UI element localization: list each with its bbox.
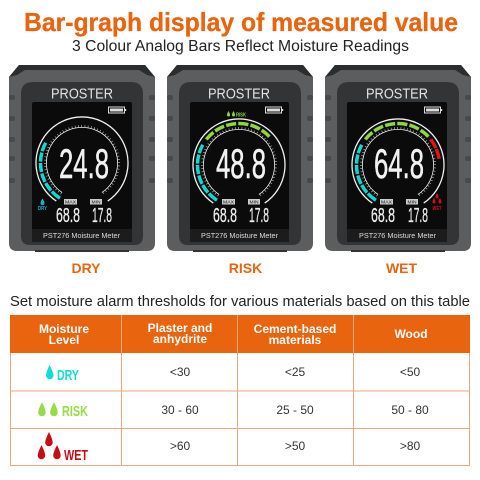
device: dry reading: 17.8 — [92, 205, 112, 227]
table heading: Set moisture alarm thresholds for various materials based on this table — [10, 293, 470, 310]
device: risk reading: MIN — [250, 200, 258, 204]
device: wet reading — [325, 65, 471, 252]
device: dry reading: PST276 Moisture Meter — [43, 233, 121, 240]
device: wet reading: MAX — [381, 200, 392, 204]
header cells: anhydrite — [153, 332, 207, 346]
label: wet: WET — [386, 260, 417, 276]
header cells: Moisture — [39, 322, 89, 336]
wet row: >80 — [400, 439, 421, 453]
device: wet reading: PROSTER — [366, 86, 428, 102]
device: wet reading: PST276 Moisture Meter — [359, 233, 437, 240]
wet row: >60 — [170, 439, 191, 453]
header cells: materials — [269, 333, 322, 347]
device: risk reading: PST276 Moisture Meter — [201, 233, 279, 240]
label: dry: DRY — [71, 260, 101, 276]
wet row: >50 — [285, 439, 306, 453]
risk row — [38, 402, 429, 420]
header cells: Plaster and — [148, 321, 212, 335]
dry row: <25 — [285, 365, 306, 379]
risk row: 50 - 80 — [391, 403, 429, 417]
device: risk reading: 17.8 — [249, 205, 269, 227]
device: risk reading — [167, 65, 313, 252]
device: wet reading: WET — [432, 206, 442, 212]
device: dry reading — [9, 65, 155, 252]
table — [10, 315, 470, 466]
subtitle: 3 Colour Analog Bars Reflect Moisture Readings — [72, 38, 409, 55]
device: risk reading: MAX — [223, 200, 234, 204]
device: dry reading: MIN — [92, 200, 100, 204]
risk row: 30 - 60 — [161, 403, 199, 417]
device: risk reading: RISK — [236, 112, 246, 118]
device: wet reading: 64.8 — [374, 140, 424, 187]
device: dry reading: 68.8 — [56, 205, 80, 227]
dry row: <30 — [170, 365, 191, 379]
device: risk reading: 48.8 — [216, 140, 266, 187]
device: wet reading: 68.8 — [371, 205, 395, 227]
wet row: WET — [64, 447, 88, 464]
device: dry reading: DRY — [38, 206, 48, 212]
header cells — [39, 321, 428, 347]
device: dry reading: MAX — [65, 200, 76, 204]
device: dry reading: 24.8 — [59, 140, 109, 187]
device: wet reading: MIN — [408, 200, 416, 204]
risk row: 25 - 50 — [276, 403, 314, 417]
dry row: <50 — [400, 365, 421, 379]
wet row — [38, 432, 421, 464]
device: risk reading: 68.8 — [213, 205, 237, 227]
risk row: RISK — [62, 404, 88, 420]
device: risk reading: PROSTER — [208, 86, 270, 102]
device: dry reading: PROSTER — [51, 86, 113, 102]
device: wet reading: 17.8 — [408, 205, 428, 227]
title: Bar-graph display of measured value — [24, 7, 458, 37]
header cells: Wood — [394, 327, 428, 341]
header cells: Level — [49, 333, 79, 347]
dry row: DRY — [57, 367, 79, 384]
label: risk: RISK — [229, 260, 262, 276]
dry row — [46, 365, 421, 384]
header cells: Cement-based — [254, 322, 336, 336]
